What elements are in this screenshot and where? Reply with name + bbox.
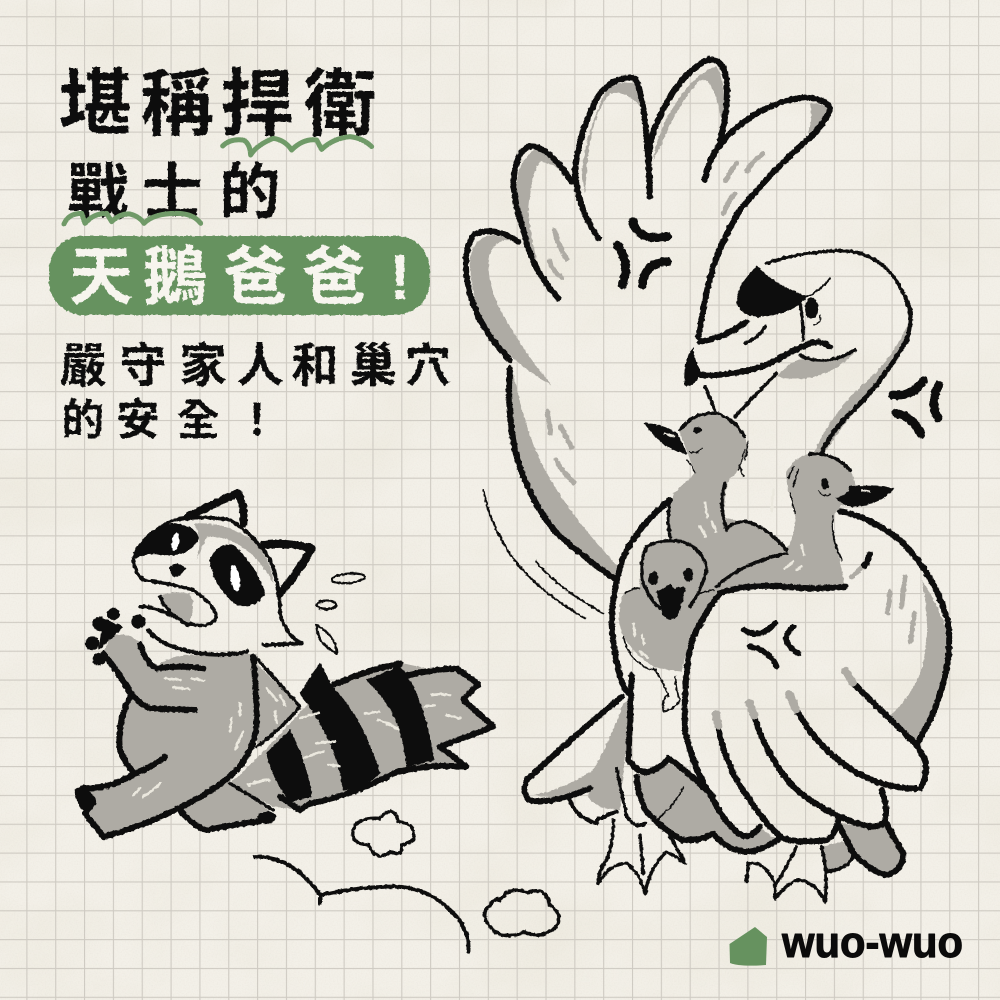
title: 堪稱捍衛戰士的 bbox=[58, 64, 376, 226]
swan body, feet and cygnets bbox=[483, 413, 949, 902]
raccoon body bbox=[77, 634, 273, 837]
motion lines bbox=[483, 490, 603, 618]
subtitle text: 嚴守家人和巢穴 bbox=[60, 339, 452, 392]
swan father bbox=[466, 60, 949, 902]
swan head and bill bbox=[685, 251, 910, 453]
icon: green house bbox=[730, 927, 767, 966]
raised wing and head bbox=[466, 60, 939, 582]
raccoon bbox=[75, 493, 559, 952]
left webbed foot bbox=[597, 768, 685, 893]
logo text: wuo-wuo bbox=[781, 918, 963, 967]
grey cygnets fill bbox=[619, 413, 860, 672]
icon: anger mark on body bbox=[744, 623, 798, 667]
wing grey shading bbox=[470, 67, 828, 582]
raccoon haunch bbox=[257, 658, 300, 747]
dust puff right bbox=[485, 890, 559, 936]
right cygnet details bbox=[788, 454, 893, 560]
raccoon head bbox=[133, 493, 312, 655]
wing outline strokes bbox=[466, 60, 830, 580]
body outlines bbox=[524, 500, 949, 875]
green underline squiggles bbox=[64, 137, 372, 224]
left cygnet details bbox=[645, 413, 804, 587]
raccoon tail bbox=[230, 663, 493, 810]
sweat drops bbox=[317, 572, 365, 653]
green pill heading: 天鵝爸爸!: 天鵝爸爸! bbox=[69, 241, 411, 313]
title: 堪稱捍衛戰士的: 戰士的 bbox=[67, 158, 281, 226]
ground line bbox=[255, 857, 469, 952]
dust puff bbox=[353, 812, 414, 856]
icon: anger mark on wing bbox=[617, 222, 667, 285]
title: 堪稱捍衛戰士的: 堪稱捍衛 bbox=[58, 64, 376, 145]
icon: anger mark by neck bbox=[893, 381, 939, 434]
right webbed foot bbox=[747, 847, 826, 902]
front cygnet facing viewer bbox=[623, 541, 713, 712]
raccoon limbs outlines bbox=[75, 645, 276, 837]
tail and thigh grey shading bbox=[533, 562, 949, 875]
subtitle text: 的安全！ bbox=[62, 397, 278, 445]
subtitle text bbox=[60, 339, 452, 445]
raccoon paw bbox=[85, 608, 145, 666]
logo bbox=[730, 918, 963, 967]
